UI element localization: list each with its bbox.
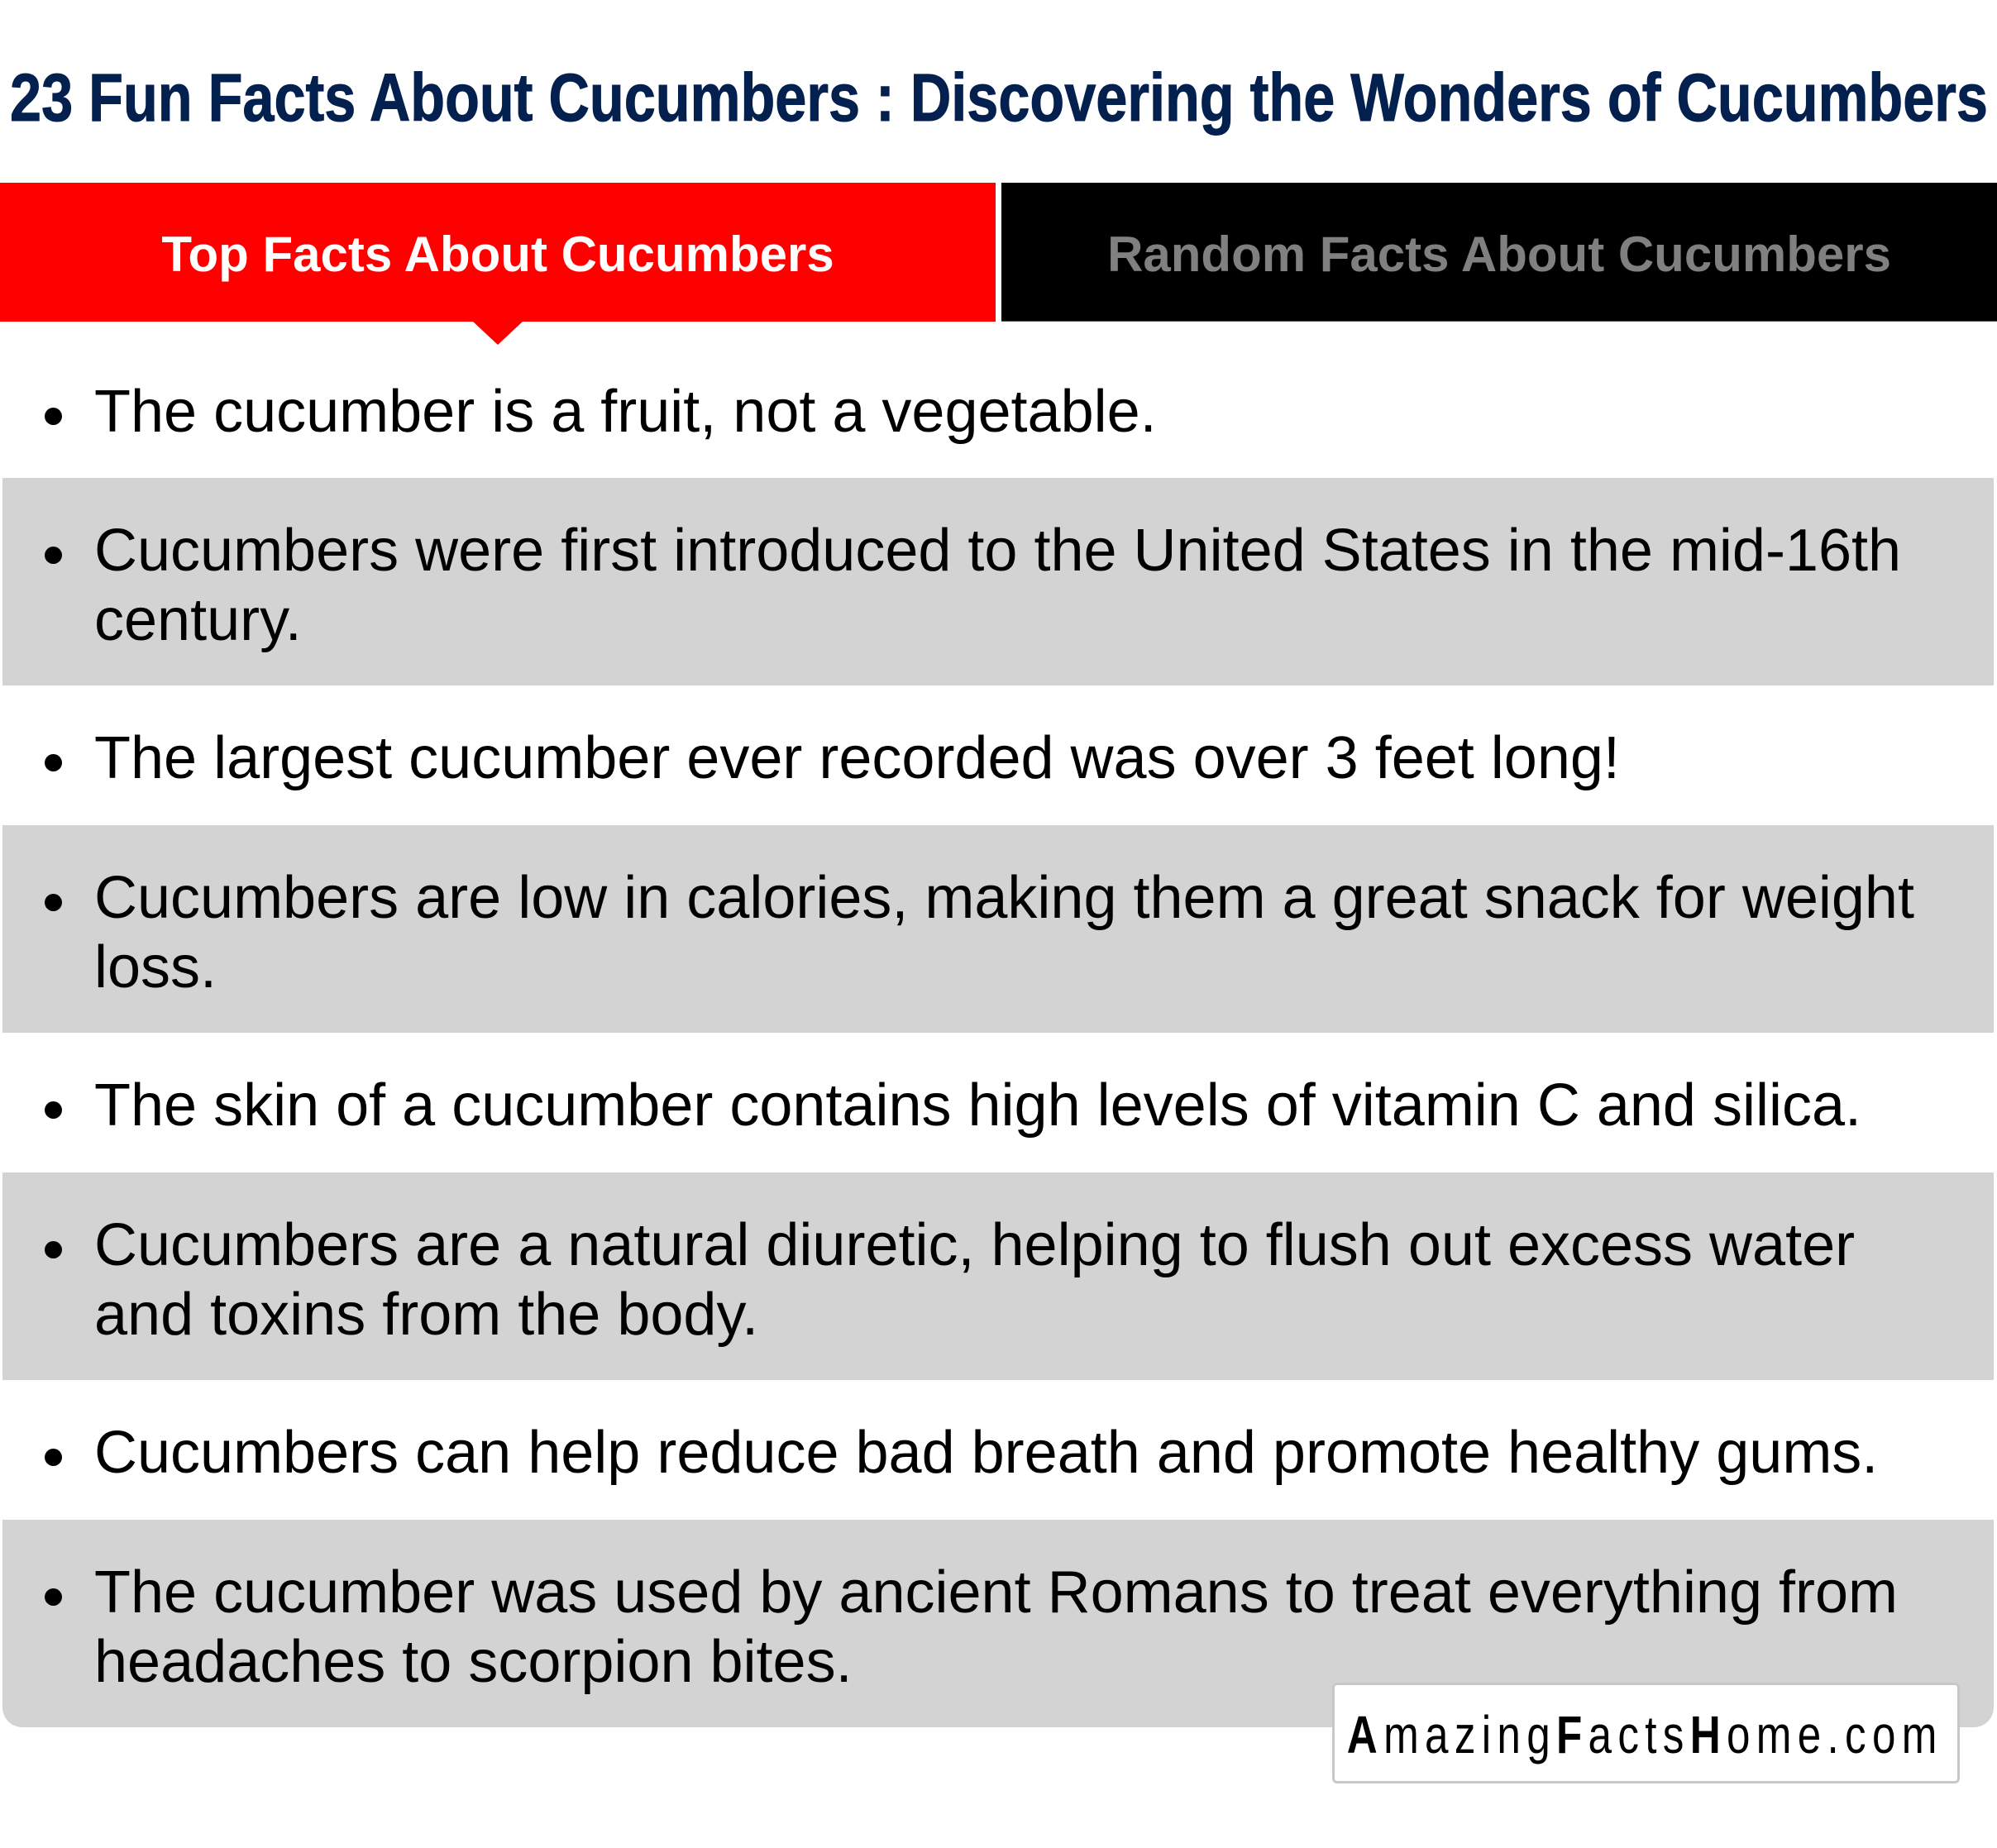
tab: random facts inactive: Random Facts About Cucumbers: [1107, 227, 1891, 282]
fact 5: The skin of a cucumber contains high levels of vitamin C and silica.: [94, 1072, 1861, 1139]
watermark logo: AmazingFactsHome.com: [1347, 1707, 1937, 1764]
fact 6: Cucumbers are a natural diuretic, helping to flush out excess water: [94, 1212, 1855, 1278]
fact 6: and toxins from the body.: [94, 1282, 758, 1348]
watermark logo: [1332, 1683, 1960, 1784]
tab: top facts active: Top Facts About Cucumbers: [161, 227, 834, 282]
fact 1: The cucumber is a fruit, not a vegetable.: [94, 379, 1157, 445]
tab: random facts inactive: [1001, 183, 1997, 322]
fact 8: headaches to scorpion bites.: [94, 1629, 853, 1695]
fact 4: loss.: [94, 934, 217, 1000]
fact 4: Cucumbers are low in calories, making them a great snack for weight: [94, 865, 1914, 931]
fact 2: century.: [94, 587, 302, 653]
fact 6: [2, 1172, 1994, 1380]
tab: top facts active: [0, 183, 996, 322]
fact 8: [2, 1520, 1994, 1727]
fact 2: Cucumbers were first introduced to the United States in the mid-16th: [94, 518, 1901, 584]
fact 4: [2, 825, 1994, 1033]
fact 8: The cucumber was used by ancient Romans to treat everything from: [94, 1559, 1898, 1626]
fact 2: [2, 478, 1994, 685]
fact 3: The largest cucumber ever recorded was over 3 feet long!: [94, 725, 1620, 791]
fact 7: Cucumbers can help reduce bad breath and promote healthy gums.: [94, 1420, 1878, 1486]
icon: active tab arrow: [473, 322, 523, 345]
